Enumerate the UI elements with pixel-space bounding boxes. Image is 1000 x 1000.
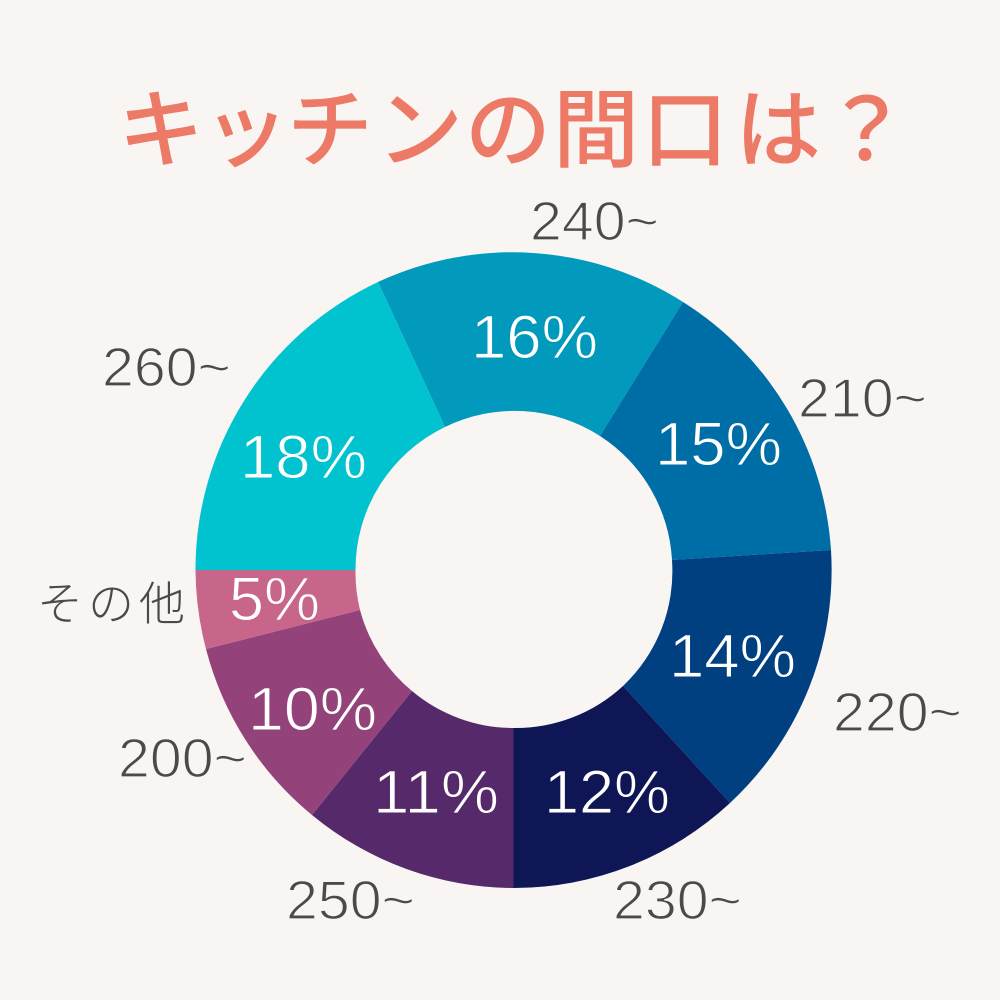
label: 200~: 200~: [118, 727, 247, 789]
slice: 220~ 14%: [623, 550, 832, 803]
label: 250~: 250~: [286, 869, 415, 931]
percent: 10%: 10%: [248, 675, 377, 743]
slice: 250~ 11%: [312, 691, 514, 888]
label: 230~: 230~: [613, 869, 742, 931]
label: 220~: 220~: [833, 681, 962, 743]
label: 210~: 210~: [798, 367, 927, 429]
slice: 200~ 10%: [206, 610, 412, 815]
slice: 240~ 16%: [378, 252, 683, 436]
percent: 11%: 11%: [373, 758, 499, 826]
label: その他: その他: [37, 568, 185, 634]
percent: 14%: 14%: [669, 622, 796, 690]
percent: 5%: 5%: [229, 565, 320, 633]
percent: 16%: 16%: [471, 303, 598, 371]
donut chart: [195, 252, 832, 888]
slice: 210~ 15%: [600, 302, 831, 560]
slice: 260~ 18%: [195, 282, 445, 570]
percent: 12%: 12%: [544, 758, 670, 826]
label: 260~: 260~: [102, 336, 231, 398]
percent: 18%: 18%: [240, 423, 367, 491]
percent: 15%: 15%: [655, 410, 782, 478]
slice: 230~ 12%: [514, 686, 730, 888]
slice: その他 5%: [196, 570, 360, 649]
title: キッチンの間口は？: [118, 60, 909, 185]
label: 240~: 240~: [530, 190, 659, 252]
